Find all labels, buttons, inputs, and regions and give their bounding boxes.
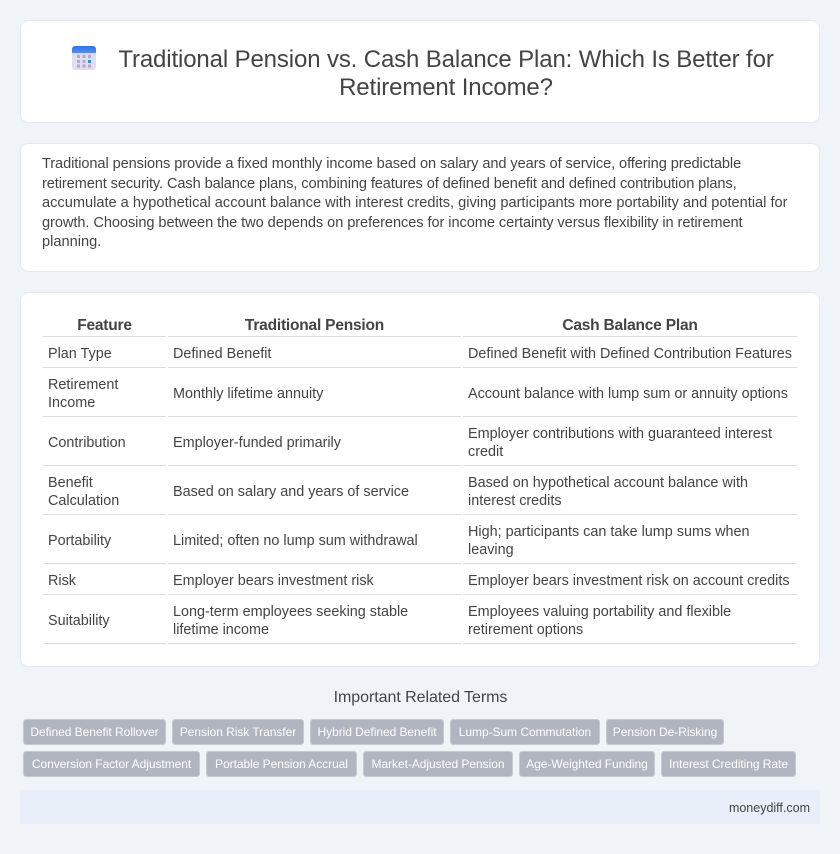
intro text: growth. Choosing between the two depends on preferences for income certainty versus flexibility in retirement xyxy=(42,214,743,230)
row: retirement income: Account balance with lump sum or annuity options xyxy=(468,386,788,402)
row: benefit calculation: interest credits xyxy=(468,492,562,508)
row: benefit calculation: Benefit xyxy=(48,474,93,490)
row: portability: Portability xyxy=(48,532,111,548)
title: Retirement Income? xyxy=(339,74,553,101)
table header row: Traditional Pension xyxy=(245,317,384,334)
row: suitability xyxy=(43,604,797,644)
row: risk: Employer bears investment risk xyxy=(173,572,374,588)
row: portability: Limited; often no lump sum withdrawal xyxy=(173,532,418,548)
tag: Pension De-Risking xyxy=(613,725,717,739)
row: retirement income: Retirement xyxy=(48,376,118,392)
row: retirement income: Monthly lifetime annuity xyxy=(173,386,323,402)
row: contribution: Employer-funded primarily xyxy=(173,434,341,450)
row: suitability: lifetime income xyxy=(173,622,269,638)
row: benefit calculation: Based on salary and years of service xyxy=(173,484,409,500)
tag xyxy=(23,719,166,745)
row: benefit calculation xyxy=(43,474,797,515)
tag xyxy=(172,719,304,745)
row: contribution: credit xyxy=(468,444,503,460)
tag xyxy=(310,719,444,745)
tag: Interest Crediting Rate xyxy=(669,757,788,771)
related terms tags xyxy=(23,719,796,777)
footer bar xyxy=(20,790,820,824)
row: risk: Risk xyxy=(48,572,76,588)
tag: Age-Weighted Funding xyxy=(526,757,648,771)
row: suitability: Long-term employees seeking stable xyxy=(173,604,408,620)
row: contribution: Employer contributions with guaranteed interest xyxy=(468,426,772,442)
row: retirement income: Income xyxy=(48,394,95,410)
tag xyxy=(661,751,796,777)
footer source: moneydiff.com xyxy=(729,801,810,815)
tag: Lump-Sum Commutation xyxy=(459,725,591,739)
tag xyxy=(363,751,513,777)
tag xyxy=(606,719,724,745)
tag xyxy=(519,751,655,777)
table header row: Cash Balance Plan xyxy=(562,317,698,334)
row: plan type: Defined Benefit with Defined Contribution Features xyxy=(468,346,792,362)
row: suitability: Employees valuing portability and flexible xyxy=(468,604,731,620)
tag: Pension Risk Transfer xyxy=(180,725,296,739)
tag: Defined Benefit Rollover xyxy=(30,725,159,739)
tag: Market-Adjusted Pension xyxy=(372,757,504,771)
tag: Portable Pension Accrual xyxy=(215,757,348,771)
row: contribution xyxy=(43,426,797,466)
table header row xyxy=(43,317,797,337)
tag xyxy=(206,751,357,777)
intro text xyxy=(42,156,788,250)
row: benefit calculation: Based on hypothetical account balance with xyxy=(468,474,748,490)
row: plan type: Plan Type xyxy=(48,346,112,362)
row: portability: leaving xyxy=(468,542,514,558)
intro text: accumulate a hypothetical account balance with interest credits, giving participants more portability and potential for xyxy=(42,195,788,211)
row: portability xyxy=(43,524,797,564)
row: suitability: Suitability xyxy=(48,612,110,628)
tag: Hybrid Defined Benefit xyxy=(318,725,436,739)
row: retirement income xyxy=(43,376,797,417)
intro text: Traditional pensions provide a fixed monthly income based on salary and years of service, offering predictable xyxy=(42,156,741,172)
row: plan type xyxy=(43,346,797,368)
intro text: planning. xyxy=(42,234,101,250)
row: benefit calculation: Calculation xyxy=(48,492,119,508)
panel: introduction xyxy=(20,143,820,272)
tag xyxy=(450,719,600,745)
title xyxy=(118,46,774,101)
row: risk xyxy=(43,572,797,595)
table header row: Feature xyxy=(77,317,132,334)
panel: comparison table xyxy=(20,292,820,667)
panel: header xyxy=(20,20,820,123)
title: Traditional Pension vs. Cash Balance Plan: Which Is Better for xyxy=(118,46,774,72)
heading: related terms: Important Related Terms xyxy=(334,689,507,706)
icon: calendar xyxy=(72,46,96,70)
row: contribution: Contribution xyxy=(48,434,126,450)
intro text: retirement security. Cash balance plans, combining features of defined benefit and defined contribution plans, xyxy=(42,176,737,192)
tag: Conversion Factor Adjustment xyxy=(32,757,191,771)
row: risk: Employer bears investment risk on account credits xyxy=(468,572,790,588)
tag xyxy=(23,751,200,777)
row: portability: High; participants can take lump sums when xyxy=(468,524,750,540)
row: suitability: retirement options xyxy=(468,622,583,638)
row: plan type: Defined Benefit xyxy=(173,346,271,362)
